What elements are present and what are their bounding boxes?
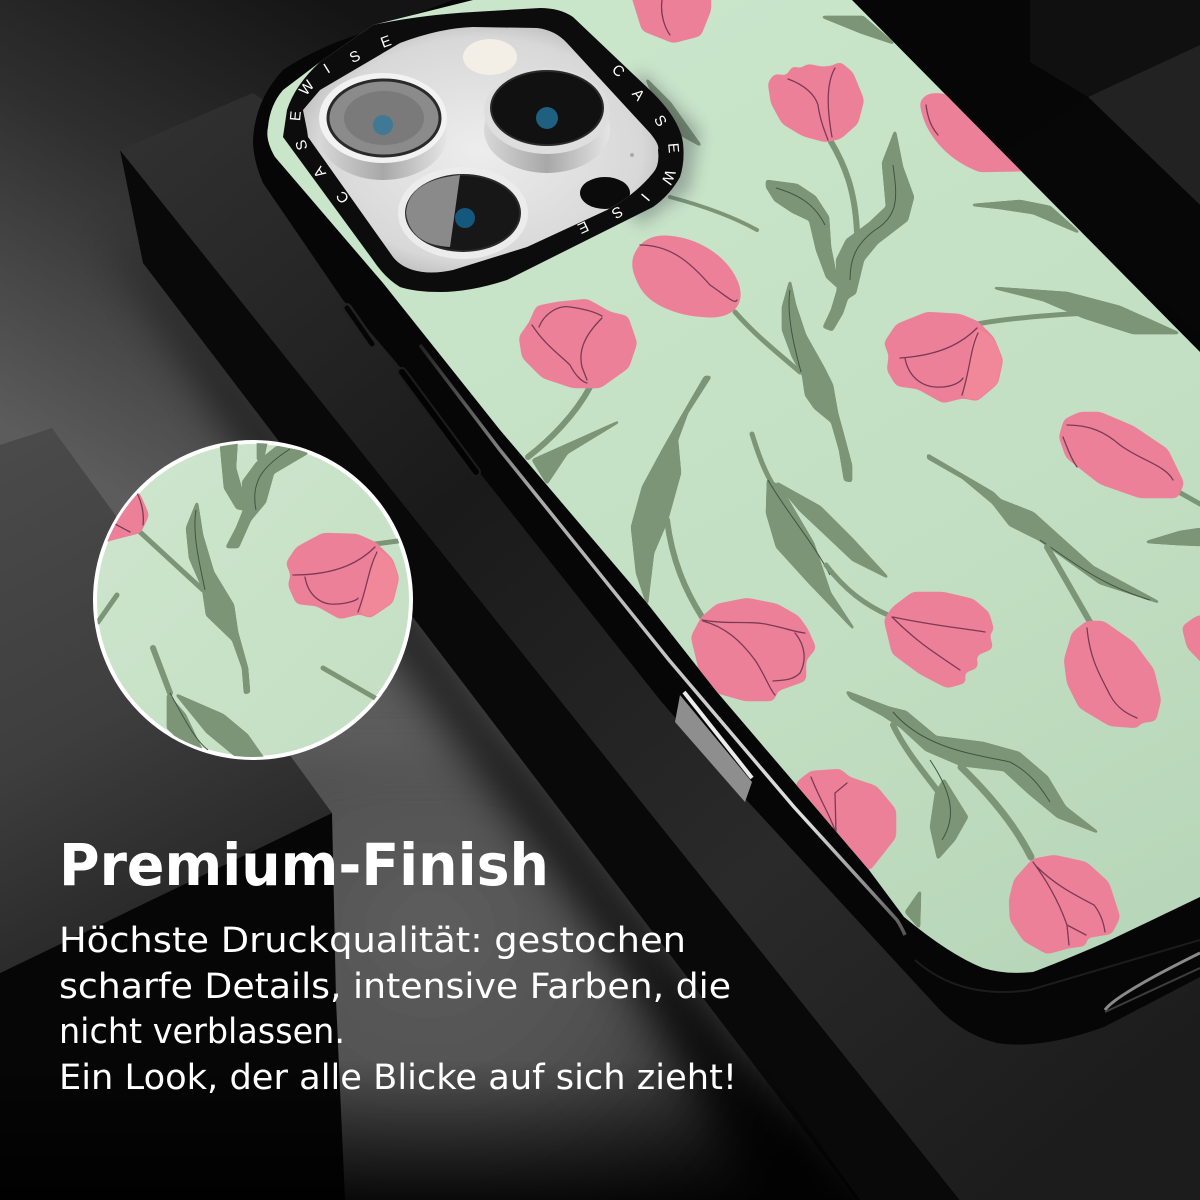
zoom circle: detail of tulip print — [90, 435, 411, 768]
CASEWISE lettering: I — [321, 61, 333, 77]
body text: scharfe Details, intensive Farben, die — [59, 967, 731, 1007]
CASEWISE lettering: E — [378, 32, 394, 52]
tulip partly hidden at edge — [797, 770, 895, 870]
tulip below camera — [633, 237, 739, 316]
tulip upper right — [921, 94, 1030, 171]
CASEWISE lettering: C — [333, 187, 353, 207]
phone back: mint green tulip print — [267, 0, 1200, 973]
lidar sensor — [580, 177, 630, 209]
body text: nicht verblassen. — [59, 1012, 345, 1052]
lens: top left — [319, 73, 447, 180]
top right dark blocks behind phone — [1000, 0, 1200, 335]
CASEWISE lettering: A — [628, 86, 648, 104]
tulip lower centre — [885, 593, 993, 687]
lens: top right — [484, 68, 610, 173]
heading: Premium-Finish — [59, 831, 549, 899]
CASEWISE lettering: E — [287, 110, 305, 122]
tulip top — [630, 0, 710, 42]
CASEWISE lettering: W — [296, 76, 319, 99]
CASEWISE lettering — [287, 32, 682, 237]
CASEWISE lettering: S — [650, 112, 670, 130]
charging port — [1105, 953, 1200, 1012]
tulip lower left — [692, 599, 815, 700]
CASEWISE lettering: A — [310, 163, 330, 181]
lenses group — [319, 39, 634, 259]
shadow cast by camera island — [627, 68, 706, 228]
body text: Ein Look, der alle Blicke auf sich zieht! — [59, 1058, 737, 1098]
tulip right — [1060, 413, 1183, 497]
CASEWISE lettering: S — [608, 202, 626, 222]
tulip lower right — [1065, 622, 1160, 727]
glossy edge highlight — [420, 345, 905, 935]
flash — [463, 39, 517, 75]
tulip at right edge — [1182, 616, 1200, 662]
CASEWISE lettering: S — [292, 138, 312, 152]
CASEWISE lettering: E — [664, 142, 682, 154]
CASEWISE lettering: E — [575, 217, 591, 237]
tulip bottom — [1010, 856, 1119, 953]
phone case: black glossy shell — [253, 0, 1200, 1045]
rim — [283, 8, 684, 292]
tulip left edge — [520, 300, 636, 387]
stems and leaves — [528, 17, 1200, 927]
side buttons — [347, 308, 752, 802]
tulip centre right — [885, 313, 1002, 402]
tulip flowers — [520, 0, 1200, 953]
circle tulip large — [287, 534, 398, 618]
CASEWISE lettering: W — [657, 167, 678, 187]
lens: bottom — [398, 167, 528, 259]
CASEWISE lettering: C — [608, 61, 628, 81]
CASEWISE lettering: I — [637, 190, 653, 204]
circle tulip small — [107, 493, 148, 542]
tulip upper centre — [769, 63, 863, 141]
body text — [59, 921, 737, 1098]
CASEWISE lettering: S — [347, 47, 363, 67]
camera island: glass window and raised black rim — [283, 8, 684, 292]
body text: Höchste Druckqualität: gestochen — [59, 921, 686, 961]
circle leaves and stems — [98, 435, 398, 768]
